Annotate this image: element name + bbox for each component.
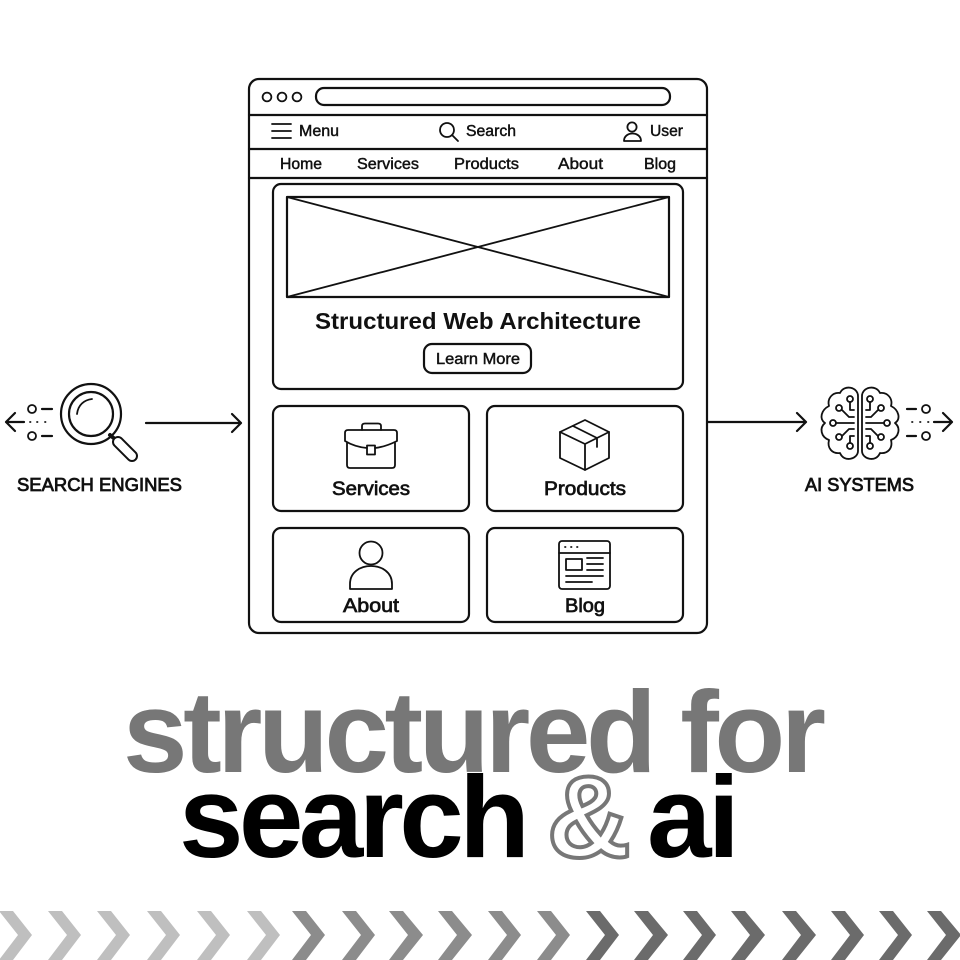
card: products: Products <box>544 479 626 500</box>
icon: search engines magnifier <box>61 384 132 456</box>
light chevrons <box>0 911 280 960</box>
icon: search <box>440 123 458 141</box>
title word: ai: ai <box>647 752 740 882</box>
icon: outgoing data signal left <box>6 405 52 440</box>
dark chevrons <box>586 911 960 960</box>
navigation links <box>280 156 676 173</box>
icon: user <box>624 122 641 141</box>
toolbar: menu, search, user <box>272 122 683 141</box>
toolbar: menu, search, user: User <box>650 123 683 140</box>
browser top bar <box>263 88 670 105</box>
card: blog: Blog <box>565 596 605 617</box>
title line one: structured for <box>123 667 826 797</box>
title word: search: search <box>179 752 530 882</box>
navigation links: Products <box>454 156 519 173</box>
icon: web page layout <box>559 541 610 589</box>
icon: box <box>560 420 609 470</box>
button: learn more <box>424 344 531 373</box>
card: blog <box>487 528 683 622</box>
navigation links: About <box>558 156 604 173</box>
card: services: Services <box>332 479 410 500</box>
panel: hero section <box>273 184 683 389</box>
navigation links: Services <box>357 156 419 173</box>
image placeholder <box>287 197 669 297</box>
arrow: website to AI systems <box>708 413 806 431</box>
browser frame <box>249 79 707 633</box>
navigation links: Blog <box>644 156 676 173</box>
arrow: search engines to website <box>146 414 241 432</box>
navigation links: Home <box>280 156 322 173</box>
toolbar: menu, search, user: Search <box>466 123 516 140</box>
icon: person <box>350 542 392 589</box>
button: learn more: Learn More <box>436 351 520 368</box>
chevron band <box>0 911 960 960</box>
hero heading: Structured Web Architecture <box>315 308 641 334</box>
icon: briefcase <box>345 424 397 468</box>
medium chevrons <box>292 911 570 960</box>
card: about: About <box>343 596 400 617</box>
panel: website wireframe browser window <box>249 79 707 633</box>
title: structured for search & ai <box>123 667 826 882</box>
label: search engines: SEARCH ENGINES <box>17 475 182 495</box>
card: about <box>273 528 469 622</box>
card: services <box>273 406 469 511</box>
card: products <box>487 406 683 511</box>
icon: AI brain <box>822 388 898 459</box>
icon: outgoing data signal right <box>907 405 952 440</box>
label: AI systems: AI SYSTEMS <box>805 475 914 495</box>
toolbar: menu, search, user: Menu <box>299 123 339 140</box>
title ampersand: & <box>547 752 631 882</box>
icon: hamburger menu <box>272 124 291 138</box>
